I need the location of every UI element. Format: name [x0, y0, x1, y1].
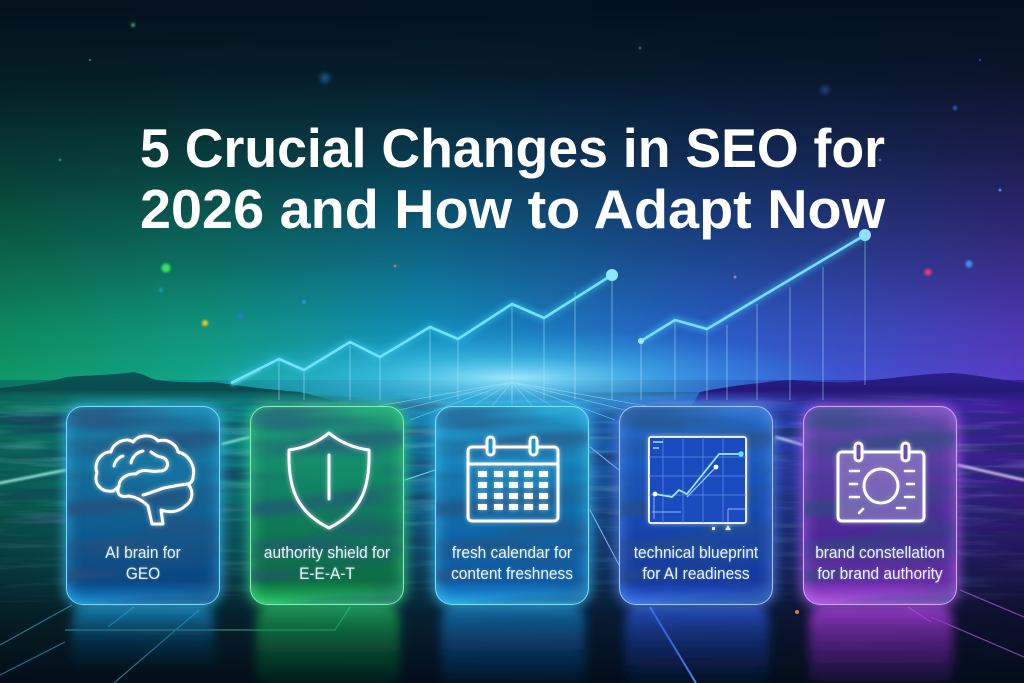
icon: calendar — [463, 432, 563, 526]
caption — [633, 543, 758, 582]
card: fresh calendar — [435, 406, 589, 605]
caption: E-E-A-T — [299, 564, 355, 582]
caption: for brand authority — [817, 564, 943, 582]
floor streak texture — [0, 392, 1024, 602]
icon: brain — [92, 431, 198, 529]
rising chart lines — [231, 229, 871, 400]
title: 2026 and How to Adapt Now — [140, 178, 885, 240]
caption: authority shield for — [264, 543, 390, 562]
caption — [104, 543, 181, 582]
caption: fresh calendar for — [452, 543, 572, 562]
chart line left — [231, 275, 612, 383]
floating particles — [58, 23, 1002, 326]
caption: brand constellation — [815, 543, 945, 562]
caption — [815, 543, 945, 583]
icon: brand constellation calendar — [834, 439, 928, 526]
distant hills — [0, 372, 1024, 408]
caption: AI brain for — [105, 543, 181, 562]
horizon glow — [182, 328, 842, 428]
floor colour wash — [0, 380, 1024, 683]
floor grid lines — [0, 382, 1024, 683]
card: AI brain for GEO — [66, 406, 220, 605]
card: technical blueprint — [619, 406, 773, 605]
chart drop lines — [279, 235, 865, 400]
title — [140, 117, 885, 240]
chart line glow — [231, 235, 865, 383]
chart line right — [641, 235, 865, 341]
floor base — [0, 380, 1024, 683]
sky colour wash — [0, 47, 1024, 380]
caption — [264, 543, 390, 582]
title: 5 Crucial Changes in SEO for — [140, 117, 885, 179]
caption: content freshness — [451, 564, 573, 582]
card reflections — [72, 606, 953, 683]
card: brand constellation — [803, 406, 957, 605]
caption: technical blueprint — [634, 543, 758, 562]
caption — [450, 543, 574, 582]
small ember — [795, 610, 799, 614]
caption: GEO — [126, 564, 160, 582]
card: authority shield — [250, 406, 404, 605]
bright diagonal streaks — [0, 370, 1024, 565]
icon: shield — [284, 429, 374, 532]
caption: for AI readiness — [642, 564, 750, 582]
icon: blueprint chart — [644, 433, 750, 533]
